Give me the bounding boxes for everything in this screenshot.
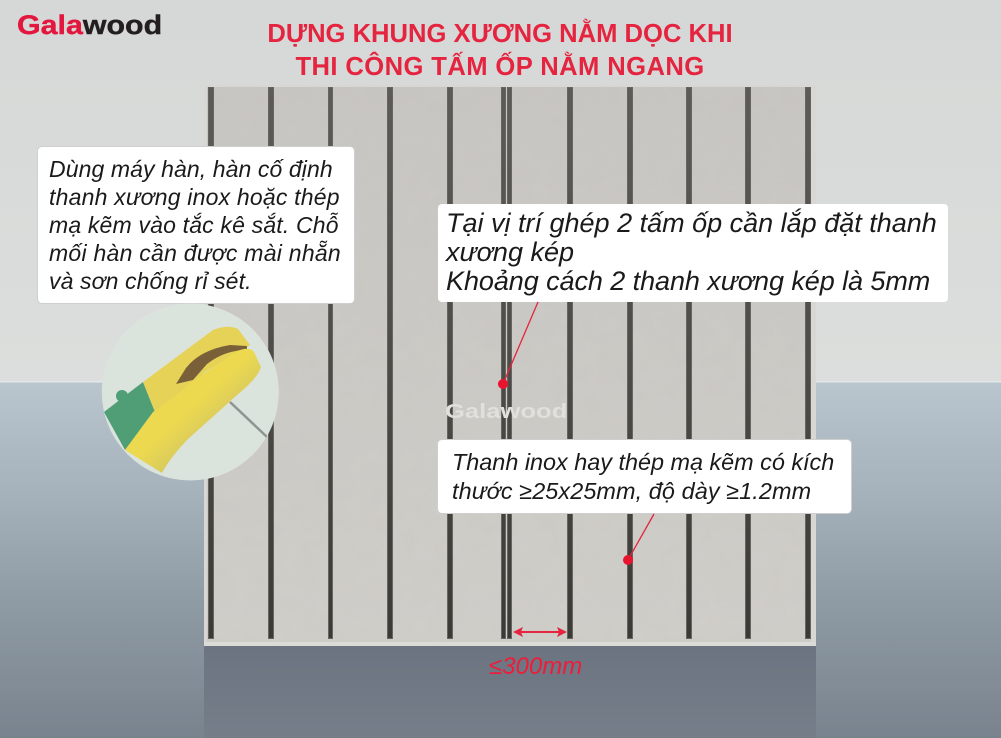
title: DỰNG KHUNG XƯƠNG NẰM DỌC KHI	[267, 20, 733, 48]
callout: double frame bar: Tại vị trí ghép 2 tấm ốp cần lắp đặt thanh	[446, 208, 937, 238]
arrow: bar spacing dimension	[513, 627, 567, 637]
callout: welding: Dùng máy hàn, hàn cố định	[49, 156, 333, 182]
callout: welding: thanh xương inox hoặc thép	[49, 184, 340, 210]
callout: welding: và sơn chống rỉ sét.	[49, 268, 252, 294]
callout: welding	[37, 146, 355, 304]
logo: Galawood	[17, 10, 162, 40]
callout: welding: mạ kẽm vào tắc kê sắt. Chỗ	[49, 212, 339, 238]
title: THI CÔNG TẤM ỐP NẰM NGANG	[295, 53, 705, 81]
icon: welding clamp photo circle	[102, 304, 279, 480]
callout: double frame bar: xương kép	[446, 237, 574, 267]
callout: bar size	[437, 439, 852, 514]
leader line: bar size pointer	[623, 514, 654, 565]
watermark logo: Galawood	[445, 401, 567, 423]
title	[267, 18, 733, 81]
callout: bar size: thước ≥25x25mm, độ dày ≥1.2mm	[452, 478, 811, 504]
leader line: double bar pointer	[498, 302, 539, 389]
callout: double frame bar: Khoảng cách 2 thanh xương kép là 5mm	[446, 266, 930, 296]
spacing label: ≤300mm	[489, 653, 582, 680]
callout: bar size: Thanh inox hay thép mạ kẽm có kích	[452, 449, 834, 475]
callout: double frame bar	[438, 204, 948, 302]
callout: welding: mối hàn cần được mài nhẵn	[49, 240, 341, 266]
